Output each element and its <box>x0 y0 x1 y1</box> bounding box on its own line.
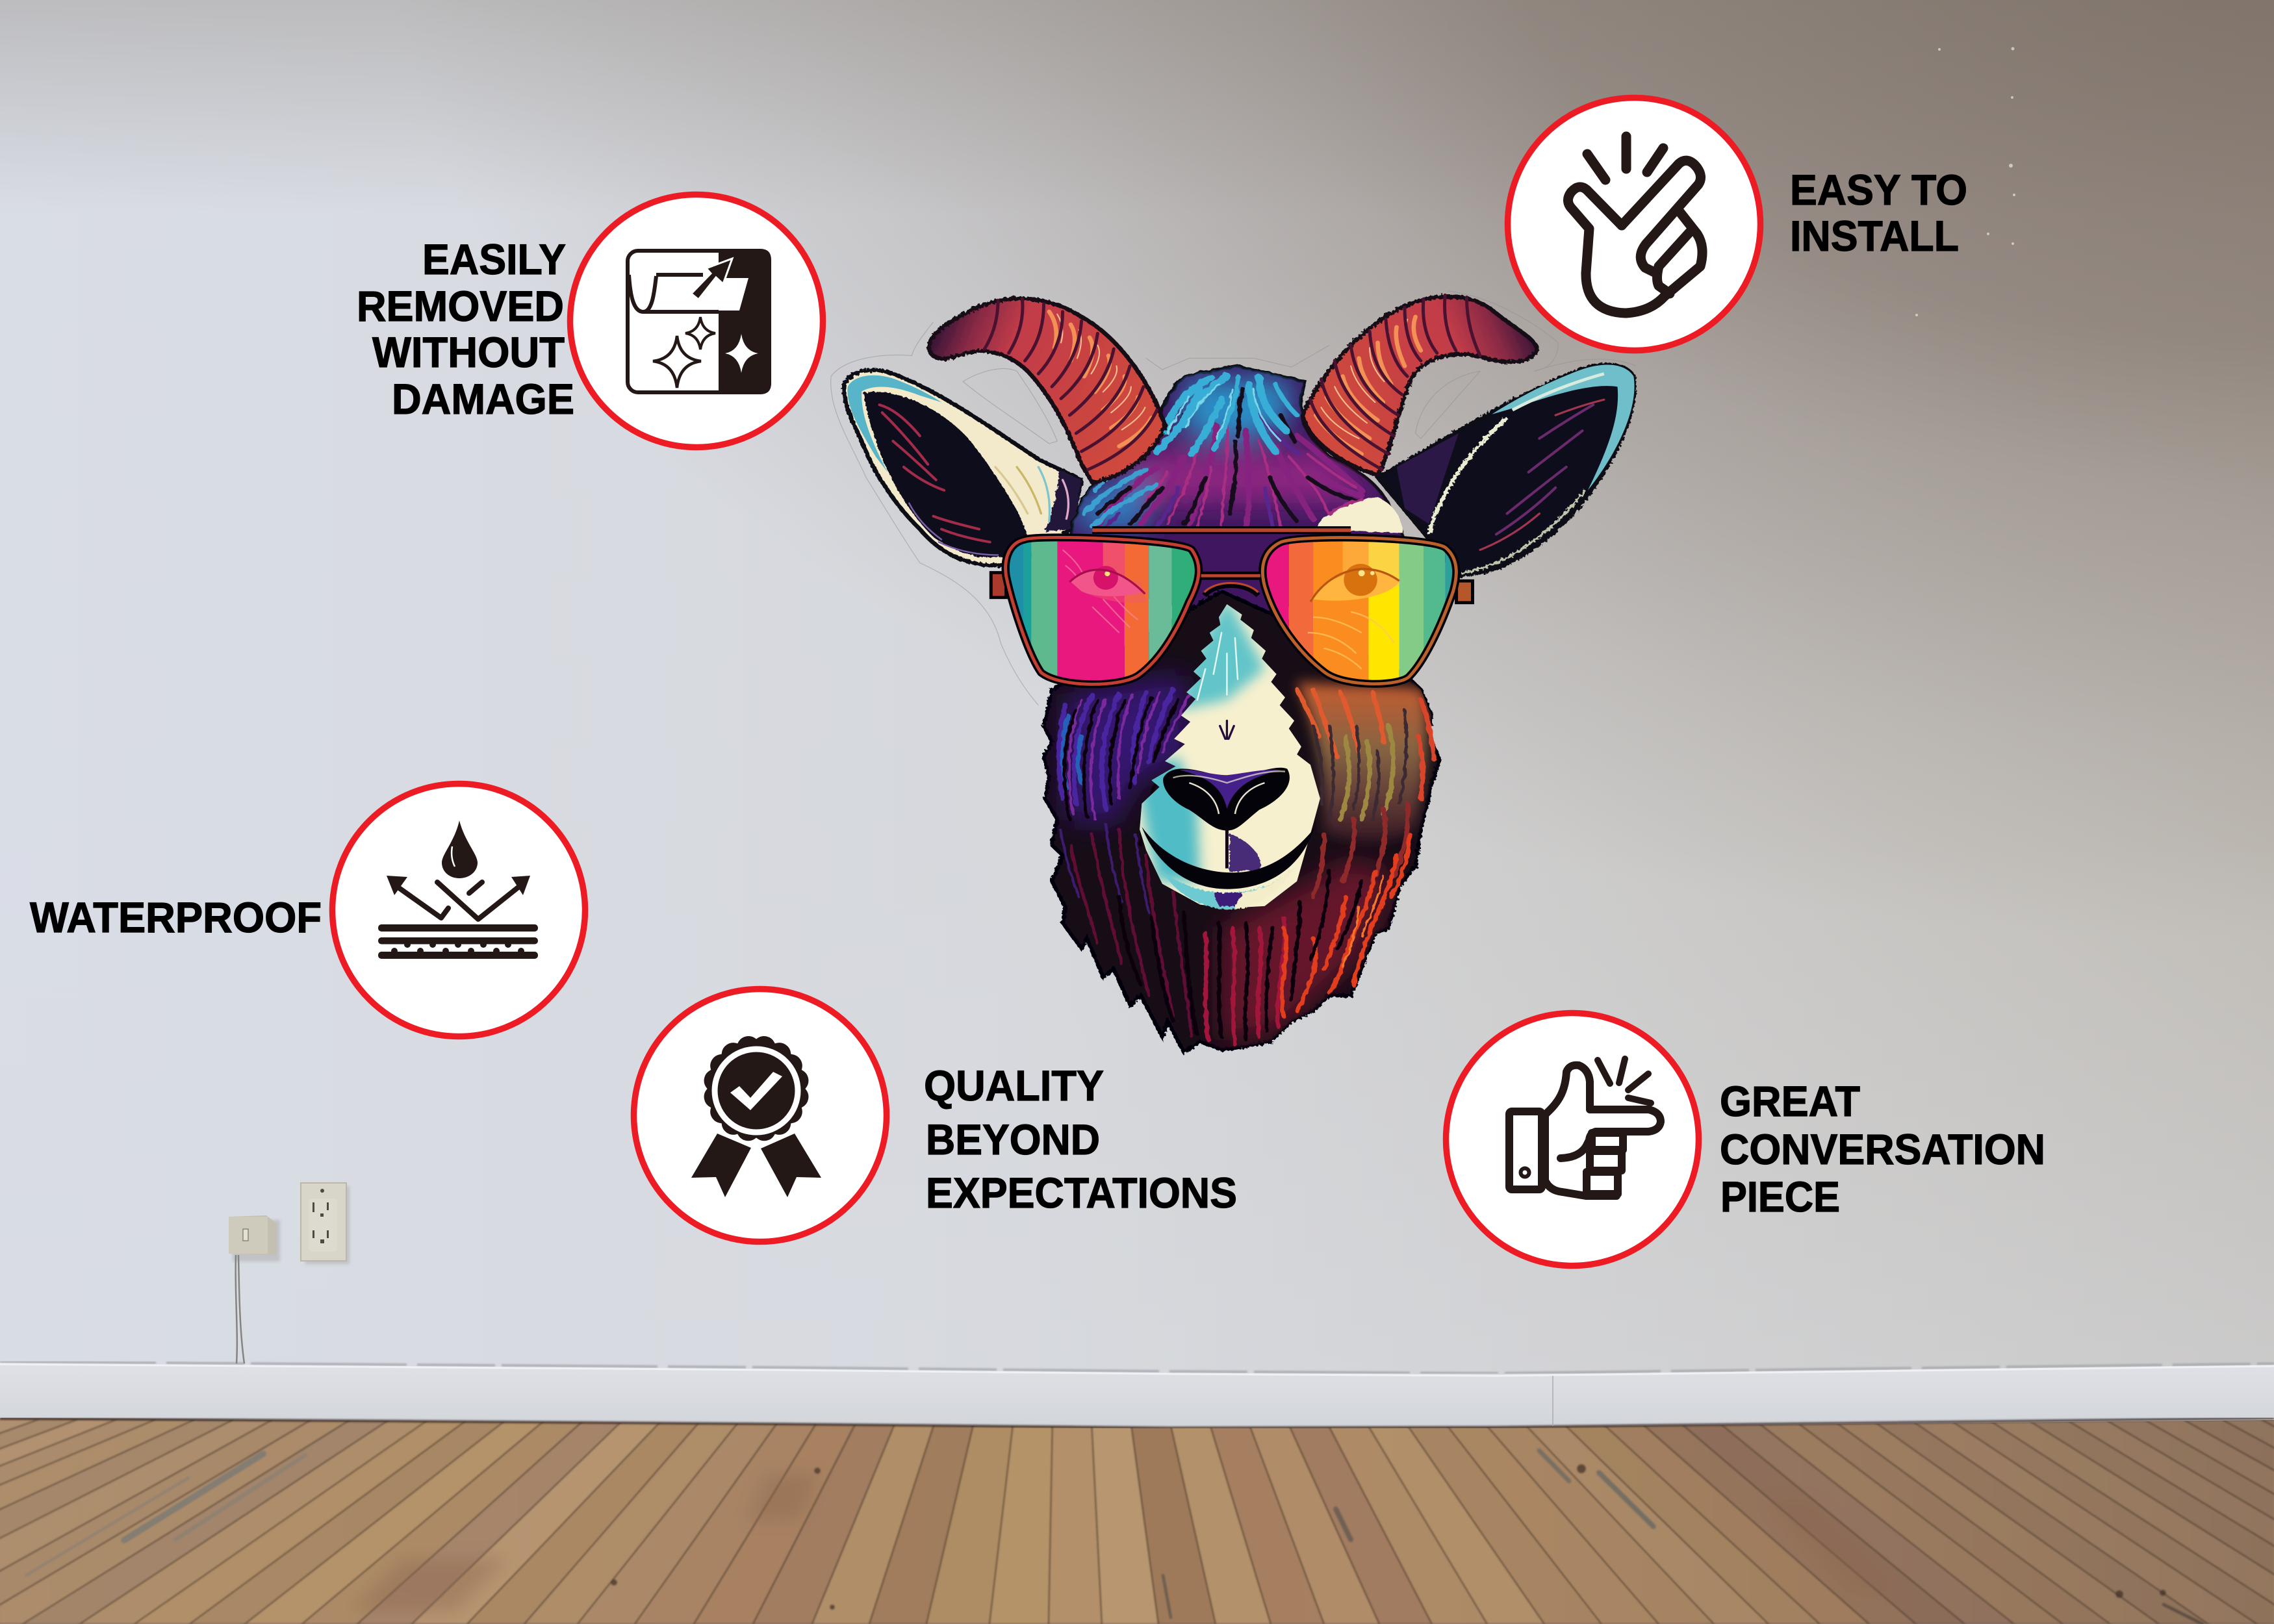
label: GREAT <box>1720 1077 1860 1125</box>
label <box>357 235 574 423</box>
feature: easily removed <box>357 195 823 447</box>
label: CONVERSATION <box>1720 1125 2045 1173</box>
icon: award rosette <box>691 1035 821 1197</box>
teal shading on the blaze <box>1135 596 1264 882</box>
feature: quality beyond expectations <box>634 989 1237 1242</box>
badge circle <box>634 989 886 1242</box>
right ear <box>1378 365 1635 576</box>
left horn <box>929 299 1165 483</box>
left ear <box>844 370 1082 565</box>
label: BEYOND <box>926 1115 1100 1163</box>
label: WATERPROOF <box>30 893 322 941</box>
fur streaks <box>1059 690 1435 1045</box>
label: QUALITY <box>924 1061 1104 1110</box>
nose <box>1163 768 1290 831</box>
icon: water repelling layers <box>378 820 538 959</box>
sunglasses <box>991 529 1472 690</box>
label: EXPECTATIONS <box>926 1169 1237 1217</box>
mouth and chin <box>1142 827 1314 909</box>
feature: waterproof <box>30 783 585 1037</box>
feature: great conversation piece <box>1446 1013 2045 1265</box>
wood floor <box>0 1410 2274 1624</box>
purple under the nose <box>1230 833 1260 872</box>
label: WITHOUT <box>372 328 565 376</box>
right lens <box>1257 529 1464 690</box>
label: REMOVED <box>357 282 564 330</box>
top bar and arms <box>991 530 1472 603</box>
goat mane and beard <box>1044 591 1440 1052</box>
goat decal <box>831 291 1637 1052</box>
wall outlet <box>301 1183 350 1264</box>
badge circle <box>570 195 823 447</box>
right horn <box>1302 295 1537 475</box>
label: EASY TO <box>1790 166 1967 214</box>
goat forehead fur <box>1066 366 1405 622</box>
light switch plate and cord <box>229 1215 280 1364</box>
badge circle <box>333 783 585 1037</box>
label <box>924 1061 1237 1217</box>
label <box>1790 166 1967 260</box>
soft colour fields <box>1066 674 1427 1042</box>
white blaze and snout <box>1140 604 1320 908</box>
left lens <box>995 529 1205 690</box>
badge circle <box>1507 97 1761 351</box>
baseboard <box>0 1362 2274 1428</box>
label: PIECE <box>1720 1173 1840 1221</box>
label: DAMAGE <box>392 375 574 423</box>
feature: easy to install <box>1507 97 1967 351</box>
goat muzzle <box>1135 596 1320 909</box>
mane silhouette <box>1044 591 1440 1052</box>
badge circle <box>1446 1013 1698 1265</box>
label: INSTALL <box>1790 212 1959 260</box>
icon: peeling sticker <box>628 249 771 394</box>
label: EASILY <box>422 235 566 283</box>
die-cut outline <box>831 291 1637 705</box>
icon: pointing hand <box>1509 1059 1661 1196</box>
bridge <box>1201 576 1260 596</box>
icon: finger snap <box>1568 136 1702 313</box>
label <box>1720 1077 2045 1221</box>
